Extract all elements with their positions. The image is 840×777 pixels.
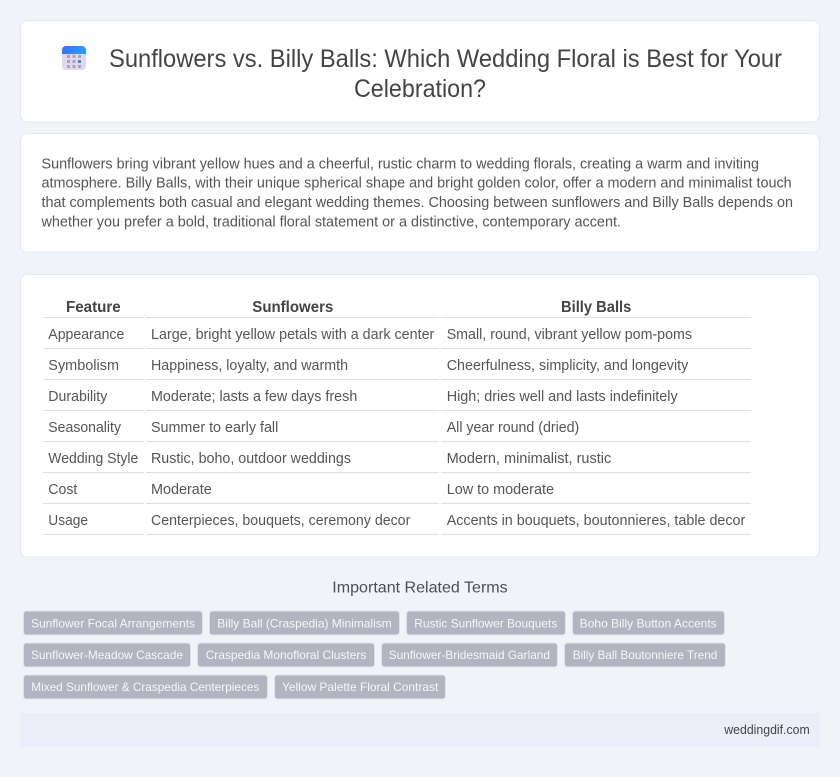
row: seasonality xyxy=(48,420,579,436)
intro text block: that complements both casual and elegant wedding themes. Choosing between sunflowers and Billy Balls depends on xyxy=(42,195,793,211)
row: appearance: Appearance xyxy=(48,327,124,343)
tag: Sunflower-Bridesmaid Garland xyxy=(382,643,558,667)
row: wedding style: Wedding Style xyxy=(48,451,138,467)
row: symbolism: Symbolism xyxy=(48,358,119,374)
panel: comparison table xyxy=(20,274,820,557)
row: cost: Moderate xyxy=(151,482,212,498)
tag: Billy Ball Boutonniere Trend xyxy=(564,643,726,667)
row: wedding style: Modern, minimalist, rustic xyxy=(447,451,611,467)
row: seasonality: Seasonality xyxy=(48,420,122,436)
row: wedding style xyxy=(48,451,611,467)
table header row: Billy Balls xyxy=(561,299,631,316)
row: cost: Cost xyxy=(48,482,77,498)
header panel xyxy=(20,20,820,122)
row: usage: Accents in bouquets, boutonnieres, table decor xyxy=(447,513,745,529)
row: seasonality: All year round (dried) xyxy=(447,420,579,436)
row: symbolism xyxy=(48,358,689,374)
tag: Craspedia Monofloral Clusters xyxy=(198,643,374,667)
row: symbolism: Happiness, loyalty, and warmth xyxy=(151,358,348,374)
tag: Billy Ball Boutonniere Trend: Billy Ball Boutonniere Trend xyxy=(573,648,717,662)
row: appearance: Large, bright yellow petals with a dark center xyxy=(151,327,435,343)
row: durability: Moderate; lasts a few days fresh xyxy=(151,389,357,405)
tag: Mixed Sunflower & Craspedia Centerpieces xyxy=(24,675,268,699)
tag: Mixed Sunflower & Craspedia Centerpieces: Mixed Sunflower & Craspedia Centerpieces xyxy=(31,680,259,694)
row: cost: Low to moderate xyxy=(447,482,554,498)
intro text block: Sunflowers bring vibrant yellow hues and a cheerful, rustic charm to wedding florals, creating a warm and inviting xyxy=(42,156,759,172)
tag: Craspedia Monofloral Clusters: Craspedia Monofloral Clusters xyxy=(206,648,366,662)
row: usage: Centerpieces, bouquets, ceremony decor xyxy=(151,513,410,529)
title: Sunflowers vs. Billy Balls: Which Wedding Floral is Best for Your xyxy=(109,45,782,73)
row: appearance: Small, round, vibrant yellow pom-poms xyxy=(447,327,692,343)
panel: intro xyxy=(20,134,820,252)
tag: Sunflower-Bridesmaid Garland: Sunflower-Bridesmaid Garland xyxy=(389,648,550,662)
title: Celebration? xyxy=(354,75,486,103)
row: durability: Durability xyxy=(48,389,108,405)
tag: Rustic Sunflower Bouquets xyxy=(406,611,566,635)
tag: Rustic Sunflower Bouquets: Rustic Sunflower Bouquets xyxy=(414,616,557,630)
table header row xyxy=(66,299,631,316)
table header row: Feature xyxy=(66,299,121,316)
row: wedding style: Rustic, boho, outdoor weddings xyxy=(151,451,351,467)
intro text block: whether you prefer a bold, traditional floral statement or a distinctive, contemporary accent. xyxy=(40,214,621,230)
related term tags xyxy=(24,611,726,699)
tag: Sunflower-Meadow Cascade: Sunflower-Meadow Cascade xyxy=(31,648,183,662)
row: durability: High; dries well and lasts indefinitely xyxy=(447,389,678,405)
tag: Sunflower Focal Arrangements xyxy=(24,611,202,635)
table header row: Sunflowers xyxy=(252,299,333,316)
tag: Sunflower-Meadow Cascade xyxy=(24,643,190,667)
footer: weddingdif.com xyxy=(723,722,810,737)
intro text block: atmosphere. Billy Balls, with their unique spherical shape and bright golden color, offer a modern and minimalist touch xyxy=(42,176,792,192)
row: usage: Usage xyxy=(48,513,88,529)
row: appearance xyxy=(48,327,692,343)
tag: Boho Billy Button Accents xyxy=(572,611,724,635)
tag: Boho Billy Button Accents: Boho Billy Button Accents xyxy=(580,616,717,630)
intro text block xyxy=(40,156,793,230)
row: seasonality: Summer to early fall xyxy=(151,420,278,436)
tag: Billy Ball (Craspedia) Minimalism xyxy=(210,611,400,635)
icon: calendar xyxy=(62,46,86,70)
heading: related terms: Important Related Terms xyxy=(332,580,508,597)
tag: Yellow Palette Floral Contrast xyxy=(274,675,446,699)
tag: Sunflower Focal Arrangements: Sunflower Focal Arrangements xyxy=(31,616,195,630)
footer xyxy=(20,713,820,747)
row: usage xyxy=(48,513,745,529)
tag: Billy Ball (Craspedia) Minimalism: Billy Ball (Craspedia) Minimalism xyxy=(217,616,392,630)
tag: Yellow Palette Floral Contrast: Yellow Palette Floral Contrast xyxy=(282,680,439,694)
row: symbolism: Cheerfulness, simplicity, and longevity xyxy=(447,358,689,374)
row: cost xyxy=(48,482,554,498)
title xyxy=(109,45,782,103)
row: durability xyxy=(48,389,678,405)
